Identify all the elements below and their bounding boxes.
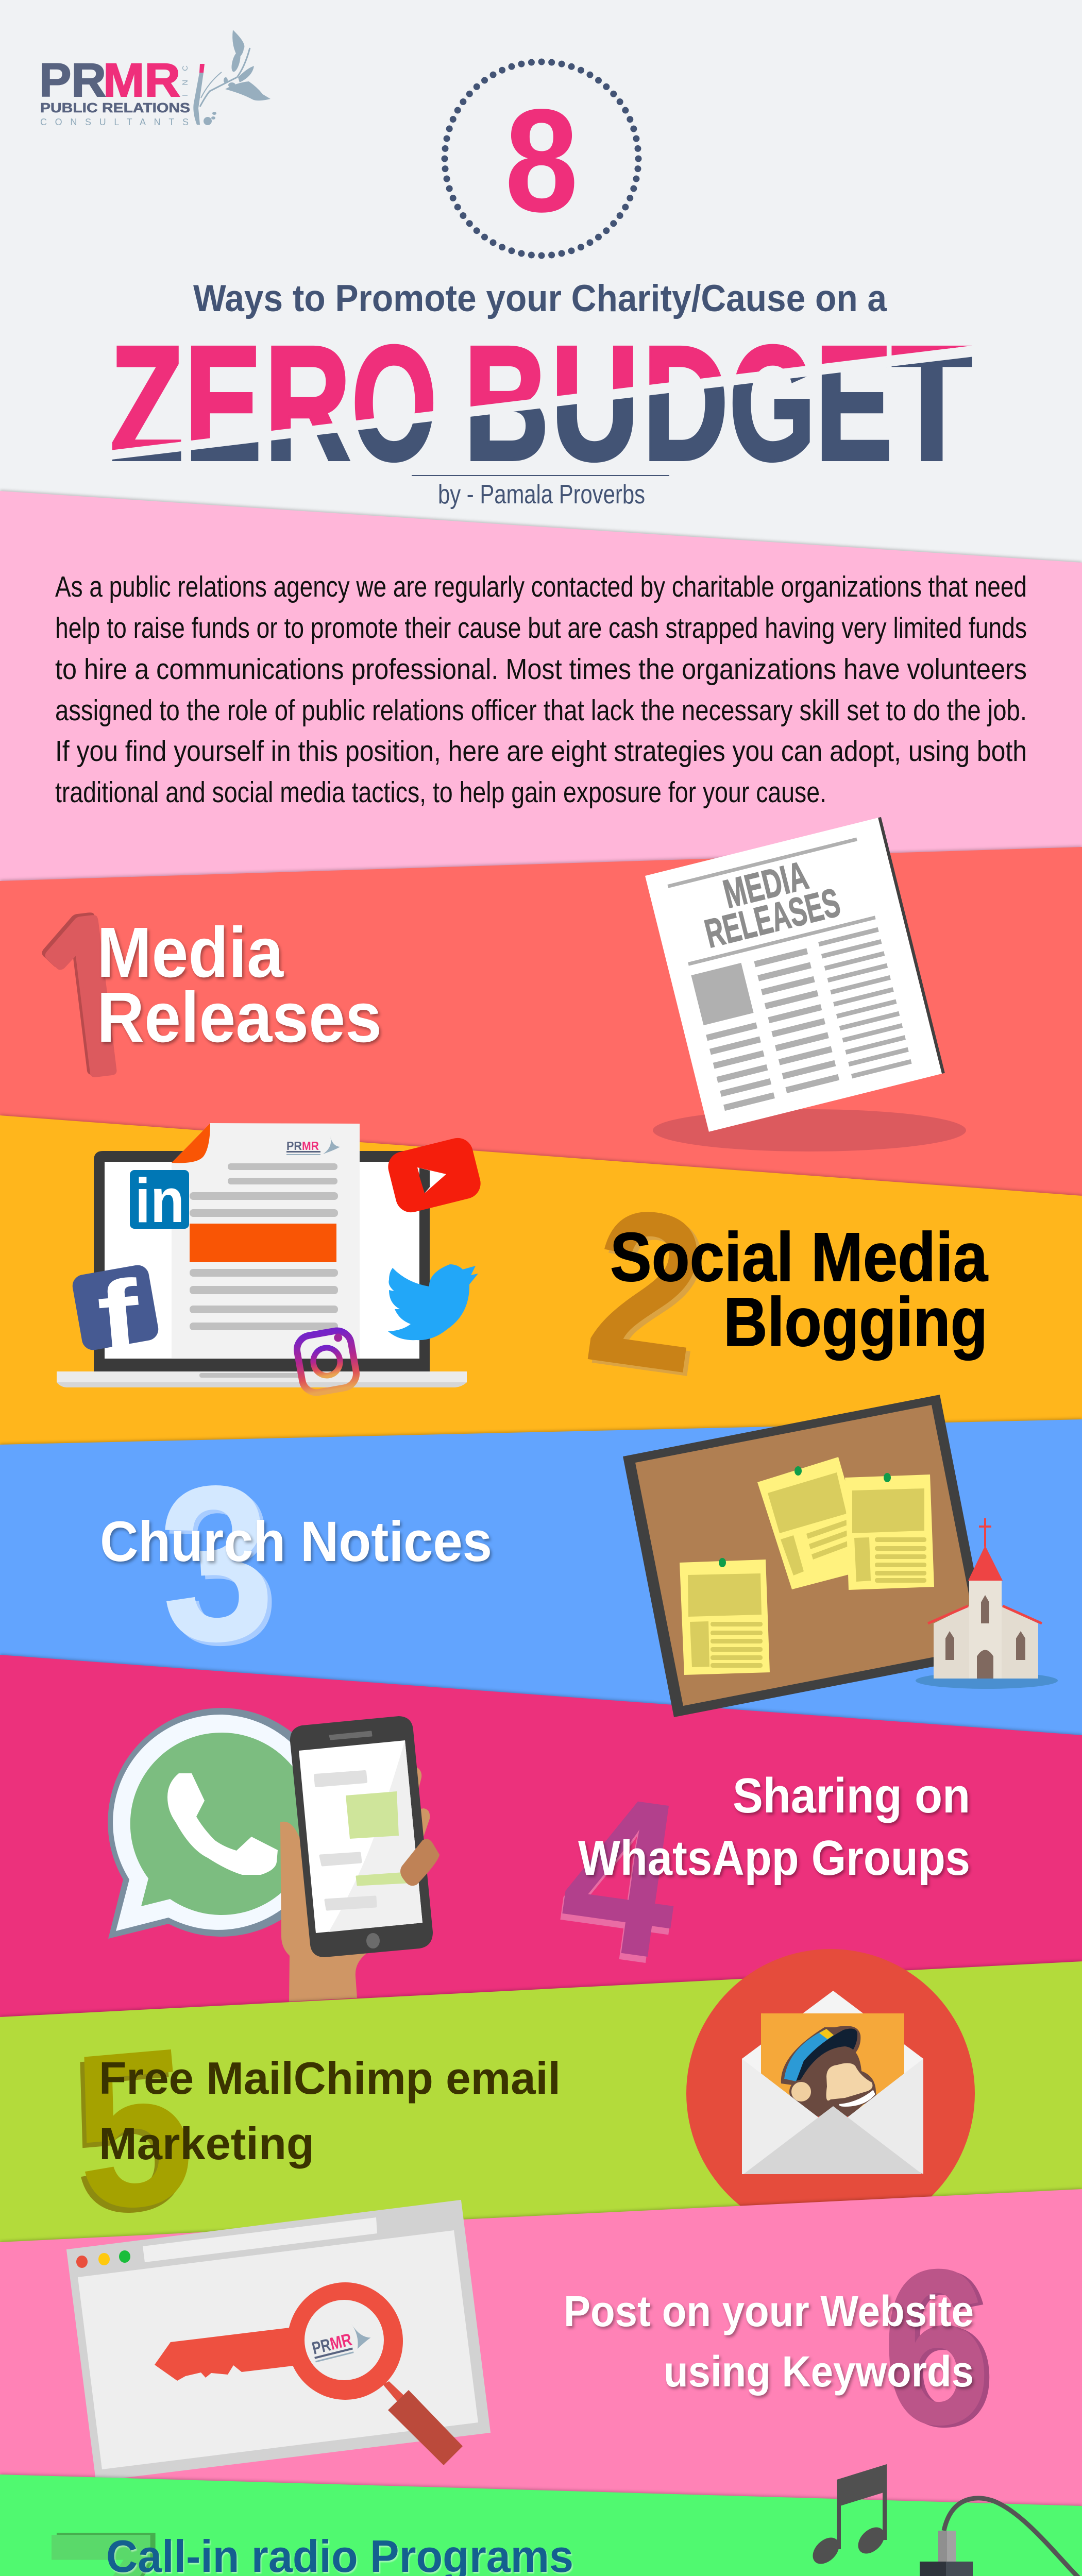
icon: twitter — [388, 1264, 478, 1340]
icon: whatsapp bubble — [108, 1708, 335, 1939]
heading: sharing on whatsapp groups — [578, 1768, 970, 1886]
icon: corkboard with notes — [623, 1395, 991, 1717]
title: zero budget: E — [184, 312, 262, 495]
number 3: 3 — [158, 1440, 284, 1693]
logo: PRMR public relations consultants: PR — [39, 54, 106, 107]
panel: section 5 mailchimp band — [0, 1961, 1082, 2267]
number 3: 3 — [154, 1437, 280, 1690]
number 6: 6 — [877, 2221, 994, 2472]
icon: facebook — [71, 1260, 160, 1372]
heading: post on your website using keywords: Post on your Website — [564, 2287, 974, 2335]
icon: hand holding phone — [280, 1716, 439, 2002]
logo: PRMR public relations consultants — [39, 30, 270, 127]
heading: post on your website using keywords: using Keywords — [664, 2347, 974, 2396]
title: zero budget: T — [891, 312, 972, 495]
title: zero budget: R — [264, 312, 351, 495]
number 2: 2 — [574, 1160, 719, 1420]
heading: media releases: Media — [97, 913, 284, 992]
title: zero budget: B — [464, 312, 549, 495]
title: zero budget: E — [815, 312, 892, 495]
icon: newspaper: MEDIA — [719, 852, 813, 917]
title: zero budget: Z — [110, 312, 183, 495]
heading: social media blogging — [610, 1219, 988, 1361]
icon: browser window with key and magnifier: MR — [328, 2330, 354, 2354]
logo: PRMR public relations consultants: MR — [103, 54, 180, 107]
icon: browser window with key and magnifier: PR — [310, 2335, 333, 2359]
panel: section 1 media releases band — [0, 847, 1082, 1236]
title: zero budget: U — [551, 312, 639, 495]
title: zero budget: E — [184, 312, 262, 495]
icon: newspaper — [645, 817, 966, 1151]
heading: free mailchimp email marketing — [99, 2053, 561, 2169]
number 5: 5 — [64, 2000, 202, 2257]
icon: instagram — [295, 1329, 359, 1395]
panel: intro pink band — [0, 491, 1082, 907]
logo: PRMR public relations consultants: PUBLIC RELATIONS — [40, 100, 190, 115]
ring of dots with number 8: 8 — [505, 79, 578, 243]
title: zero budget: Z — [110, 312, 183, 495]
heading: sharing on whatsapp groups: Sharing on — [733, 1768, 970, 1823]
title: zero budget: U — [551, 312, 639, 495]
number 2: 2 — [579, 1163, 723, 1424]
logo: PRMR public relations consultants: INC — [181, 65, 190, 96]
icon: newspaper: RELEASES — [700, 879, 844, 957]
number 1: 1 — [14, 894, 166, 1113]
title: zero budget: D — [643, 312, 729, 495]
panel: section 2 social media band — [0, 1115, 1082, 1468]
number 6: 6 — [883, 2223, 1000, 2475]
number 5: 5 — [60, 2005, 198, 2262]
title: zero budget — [112, 344, 972, 463]
icon: mailchimp envelope on red circle — [686, 1949, 975, 2238]
logo: PRMR public relations consultants: CONSULTANTS — [40, 117, 189, 127]
heading: social media blogging: Social Media — [610, 1219, 988, 1296]
icon: youtube — [385, 1134, 484, 1216]
panel: section 4 whatsapp band — [0, 1655, 1082, 2061]
heading: sharing on whatsapp groups: WhatsApp Groups — [578, 1831, 970, 1886]
icon: linkedin: in — [135, 1165, 184, 1235]
title: zero budget: E — [815, 312, 892, 495]
intro paragraph: traditional and social media tactics, to help gain exposure for your cause. — [55, 776, 826, 809]
title: zero budget: R — [264, 312, 351, 495]
heading: free mailchimp email marketing: Marketing — [99, 2118, 314, 2169]
panel: section 7 radio band — [0, 2475, 1082, 2576]
number 1: 1 — [11, 892, 163, 1110]
heading: church notices: Church Notices — [100, 1510, 492, 1573]
title: zero budget: B — [464, 312, 549, 495]
icon: church — [916, 1518, 1058, 1689]
heading: post on your website using keywords — [564, 2287, 974, 2396]
heading: social media blogging: Blogging — [723, 1284, 988, 1361]
number 4: 4 — [546, 1751, 695, 2012]
title: zero budget: T — [891, 312, 972, 495]
icon: blog document: PR — [286, 1139, 302, 1153]
icon: microphone and stand — [900, 2498, 1082, 2576]
icon: facebook: f — [93, 1260, 144, 1372]
heading: media releases — [97, 913, 382, 1057]
panel: section 6 website band — [0, 2189, 1082, 2524]
heading: ways to promote: Ways to Promote your Charity/Cause on a — [193, 278, 887, 319]
heading: free mailchimp email marketing: Free MailChimp email — [99, 2053, 561, 2104]
icon: blog document — [172, 1123, 360, 1358]
intro paragraph — [55, 570, 1027, 809]
title: zero budget: O — [351, 312, 437, 495]
ring of dots with number 8 — [445, 62, 638, 256]
title: zero budget: D — [643, 312, 729, 495]
icon: browser window with key and magnifier — [67, 2200, 490, 2481]
title: zero budget: G — [729, 312, 816, 495]
icon: blog document: MR — [302, 1139, 319, 1153]
heading: media releases: Releases — [97, 978, 382, 1057]
icon: laptop — [57, 1151, 467, 1387]
number 4: 4 — [548, 1745, 697, 2006]
title: zero budget: G — [729, 312, 816, 495]
icon: beamed music notes — [808, 2464, 889, 2569]
byline: by - Pamala Proverbs — [438, 480, 645, 510]
title: zero budget: O — [351, 312, 437, 495]
panel: section 3 church notices band — [0, 1419, 1082, 1803]
